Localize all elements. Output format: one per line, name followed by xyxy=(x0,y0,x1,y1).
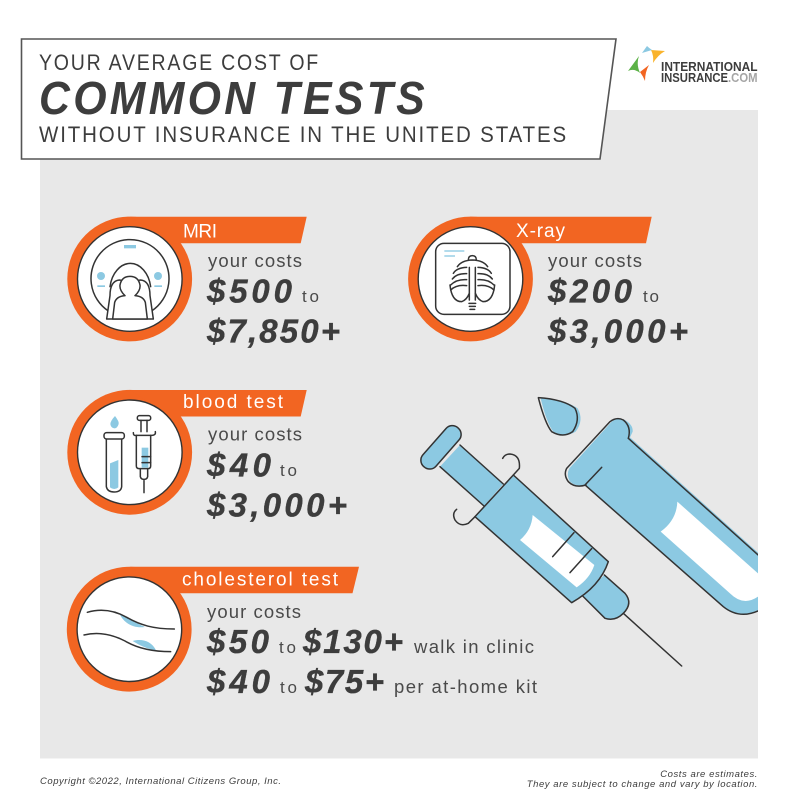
X-ray to: to xyxy=(643,287,659,306)
walk in clinic costs: $50 xyxy=(206,623,270,660)
panel: MRI xyxy=(67,217,340,350)
background panel xyxy=(40,110,758,758)
blood test label: blood test xyxy=(183,392,284,413)
at-home kit costs: $40 xyxy=(206,663,271,700)
syringe window xyxy=(520,515,594,587)
X-ray your costs: your costs xyxy=(548,250,642,271)
illustration: syringe xyxy=(417,422,682,666)
cholesterol test label: cholesterol test xyxy=(182,570,339,590)
walk in clinic costs: walk in clinic xyxy=(413,636,534,657)
MRI to: to xyxy=(302,287,319,306)
illustration: syringe, drop and test tube xyxy=(417,398,760,666)
at-home kit costs: $75+ xyxy=(304,663,384,700)
illustration: drop xyxy=(538,398,581,435)
X-ray low cost: $200 xyxy=(547,272,633,310)
logo mark xyxy=(628,46,665,81)
MRI badge xyxy=(67,217,307,341)
walk in clinic costs: $130+ xyxy=(302,623,403,660)
X-ray label: X-ray xyxy=(516,221,566,242)
blood test high cost: $3,000+ xyxy=(206,486,347,524)
syringe rod fill xyxy=(440,445,503,506)
X-ray badge xyxy=(408,217,652,341)
icon: artery with plaque xyxy=(84,610,174,652)
syringe barrel fill xyxy=(475,475,608,603)
blood test to: to xyxy=(280,461,297,480)
MRI high cost: $7,850+ xyxy=(206,312,340,350)
title line 2: COMMON TESTS xyxy=(39,72,428,124)
MRI label: MRI xyxy=(183,222,217,242)
title banner xyxy=(22,39,616,159)
cholesterol test badge xyxy=(67,567,359,692)
logo text line 1: INTERNATIONAL xyxy=(661,60,758,74)
at-home kit costs: per at-home kit xyxy=(394,676,537,697)
panel: cholesterol test xyxy=(67,567,537,700)
MRI your costs: your costs xyxy=(208,250,302,271)
walk in clinic costs xyxy=(206,623,534,660)
title line 3: WITHOUT INSURANCE IN THE UNITED STATES xyxy=(39,122,568,147)
icon: test tube and syringe xyxy=(104,416,155,493)
logo xyxy=(628,46,758,85)
title line 1: YOUR AVERAGE COST OF xyxy=(39,50,320,75)
icon: X-ray ribcage xyxy=(436,243,510,314)
illustration: test tube xyxy=(565,419,760,614)
walk in clinic costs: to xyxy=(279,638,296,657)
blood test low cost: $40 xyxy=(206,446,272,484)
footer copyright: Copyright ©2022, International Citizens Group, Inc. xyxy=(40,776,281,787)
at-home kit costs: to xyxy=(280,678,297,697)
icon: MRI scanner xyxy=(91,240,169,319)
MRI low cost: $500 xyxy=(206,272,293,310)
blood test badge xyxy=(67,390,307,515)
cholesterol your costs: your costs xyxy=(207,601,301,622)
footer disclaimer xyxy=(527,769,758,790)
syringe plunger rim xyxy=(420,424,462,470)
logo text line 2: INSURANCE.COM xyxy=(661,71,758,85)
blood test your costs: your costs xyxy=(208,424,302,444)
at-home kit costs xyxy=(206,663,537,700)
panel: blood test xyxy=(67,390,347,524)
panel: X-ray xyxy=(408,217,688,350)
syringe nose fill xyxy=(583,575,629,619)
X-ray high cost: $3,000+ xyxy=(547,312,688,350)
footer disclaimer: Costs are estimates. xyxy=(660,769,758,780)
title box xyxy=(22,39,616,159)
footer disclaimer: They are subject to change and vary by location. xyxy=(527,779,758,790)
